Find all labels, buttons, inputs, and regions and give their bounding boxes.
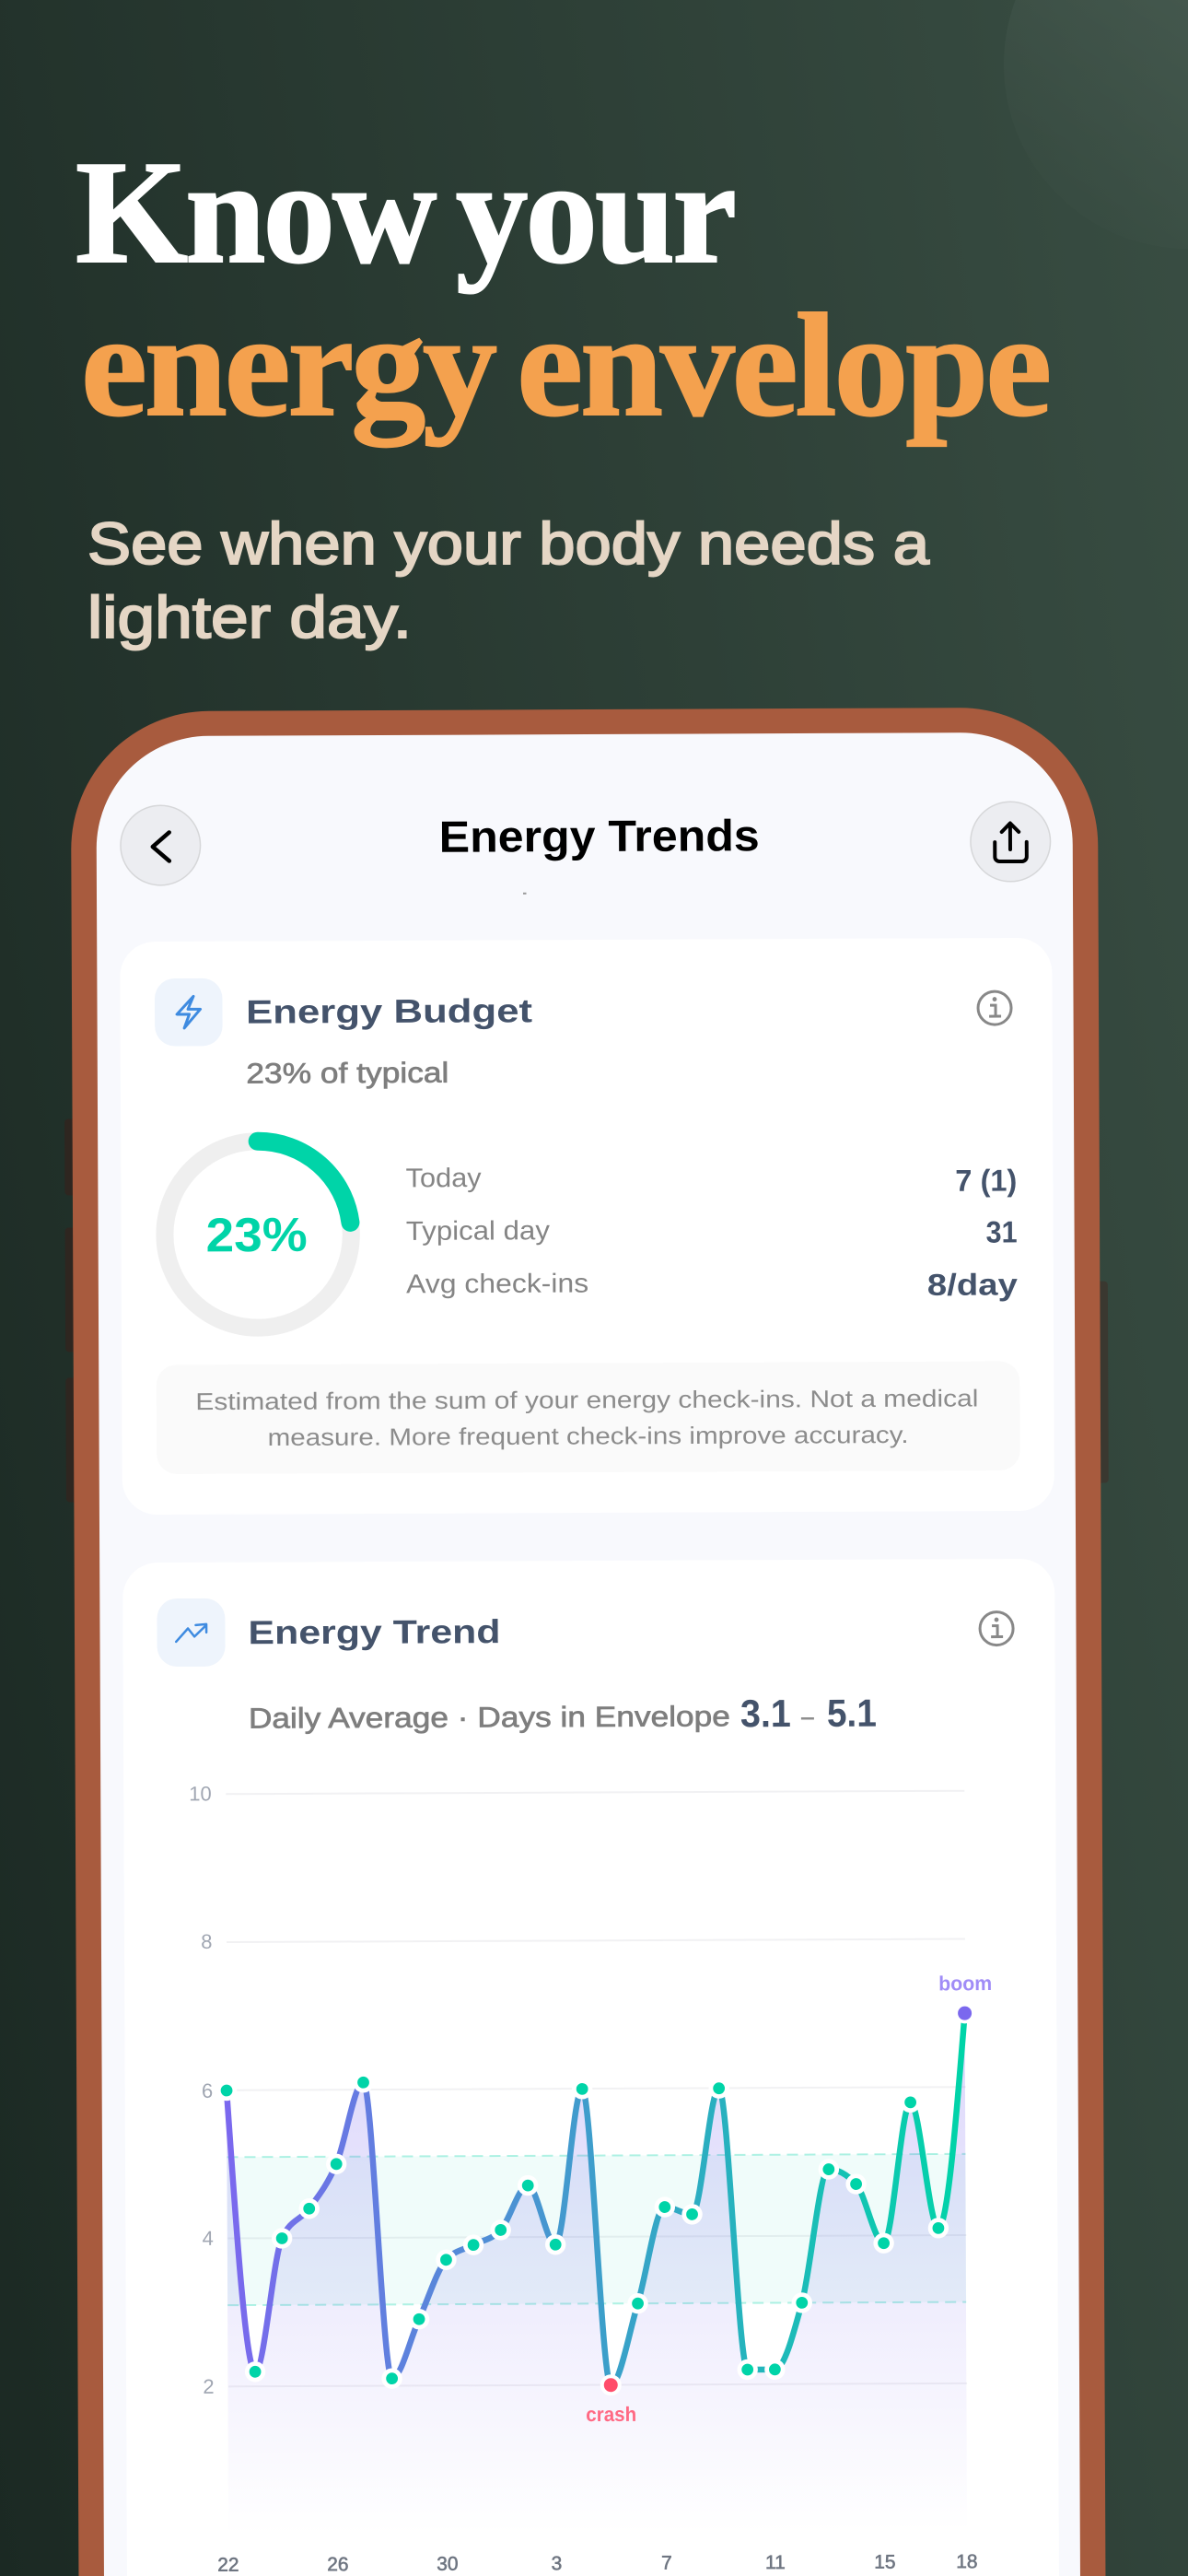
x axis labels: 15 bbox=[874, 2552, 896, 2573]
y axis labels: 4 bbox=[203, 2227, 214, 2250]
y axis labels: 2 bbox=[203, 2375, 215, 2398]
phone side buttons bbox=[64, 1115, 1109, 1502]
disclaimer note bbox=[157, 1361, 1020, 1474]
envelope summary bbox=[249, 1692, 877, 1738]
envelope summary: Daily Average · Days in Envelope bbox=[249, 1700, 730, 1735]
header bbox=[121, 802, 1051, 885]
data points bbox=[215, 2003, 977, 2397]
y axis labels: 6 bbox=[202, 2079, 213, 2102]
stats values: 7 (1) bbox=[955, 1163, 1017, 1198]
x axis labels: 18 bbox=[956, 2551, 978, 2572]
sublabel: 23% of typical bbox=[246, 1057, 448, 1090]
phone screen bbox=[96, 732, 1080, 2576]
subtitle: lighter day. bbox=[87, 584, 412, 650]
icon: info bbox=[978, 991, 1011, 1025]
card background bbox=[120, 938, 1054, 1515]
x axis labels bbox=[217, 2551, 978, 2576]
title: energy envelope bbox=[81, 283, 1049, 448]
decorative glow circle bbox=[1004, 0, 1188, 249]
crash marker: crash bbox=[586, 2403, 636, 2426]
progress ring: 23% bbox=[205, 1209, 308, 1262]
y axis labels: 10 bbox=[189, 1782, 212, 1805]
subtitle: See when your body needs a bbox=[87, 510, 929, 577]
title bbox=[76, 130, 1049, 448]
heading: energy budget: Energy Budget bbox=[246, 991, 532, 1031]
progress ring bbox=[164, 1141, 352, 1329]
x axis labels: 11 bbox=[765, 2552, 786, 2573]
y axis labels: 8 bbox=[201, 1930, 213, 1953]
boom marker: boom bbox=[938, 1972, 992, 1995]
card background bbox=[122, 1559, 1059, 2576]
phone frame bbox=[71, 708, 1105, 2576]
stats labels: Today bbox=[406, 1164, 482, 1193]
stats values: 8/day bbox=[927, 1267, 1019, 1302]
screen title: Energy Trends bbox=[439, 812, 760, 862]
envelope summary: 3.1 bbox=[740, 1692, 791, 1735]
disclaimer note: Estimated from the sum of your energy check-ins. Not a medical bbox=[195, 1384, 978, 1415]
trend line bbox=[227, 2013, 966, 2387]
area under line bbox=[227, 2013, 967, 2535]
x axis labels: 7 bbox=[661, 2553, 672, 2574]
phone mockup bbox=[63, 708, 1113, 2576]
line chart bbox=[189, 1779, 995, 2576]
boom marker bbox=[938, 1972, 992, 2020]
stats labels: Typical day bbox=[406, 1216, 550, 1247]
x axis labels: 3 bbox=[552, 2553, 562, 2574]
stats values: 31 bbox=[986, 1214, 1018, 1249]
title: Know your bbox=[76, 130, 734, 294]
heading: energy trend: Energy Trend bbox=[248, 1612, 501, 1651]
disclaimer note: measure. More frequent check-ins improve accuracy. bbox=[268, 1421, 909, 1451]
panel: energy budget bbox=[120, 938, 1054, 1515]
x axis labels: 30 bbox=[437, 2554, 459, 2575]
stats labels: Avg check-ins bbox=[406, 1270, 588, 1299]
subtitle bbox=[87, 510, 929, 650]
panel: energy trend bbox=[122, 1559, 1059, 2576]
stats values bbox=[926, 1163, 1019, 1302]
energy envelope band bbox=[227, 2154, 966, 2305]
envelope summary: 5.1 bbox=[827, 1692, 877, 1735]
icon: info bbox=[980, 1611, 1013, 1645]
crash marker bbox=[586, 2378, 636, 2426]
icon: trend arrow bbox=[157, 1598, 226, 1667]
y axis labels bbox=[189, 1782, 215, 2398]
back button bbox=[121, 805, 201, 885]
share button bbox=[971, 802, 1051, 882]
x axis labels: 22 bbox=[217, 2555, 239, 2576]
icon: lightning bolt bbox=[155, 978, 223, 1047]
stats labels bbox=[406, 1164, 588, 1299]
x axis labels: 26 bbox=[327, 2554, 349, 2575]
